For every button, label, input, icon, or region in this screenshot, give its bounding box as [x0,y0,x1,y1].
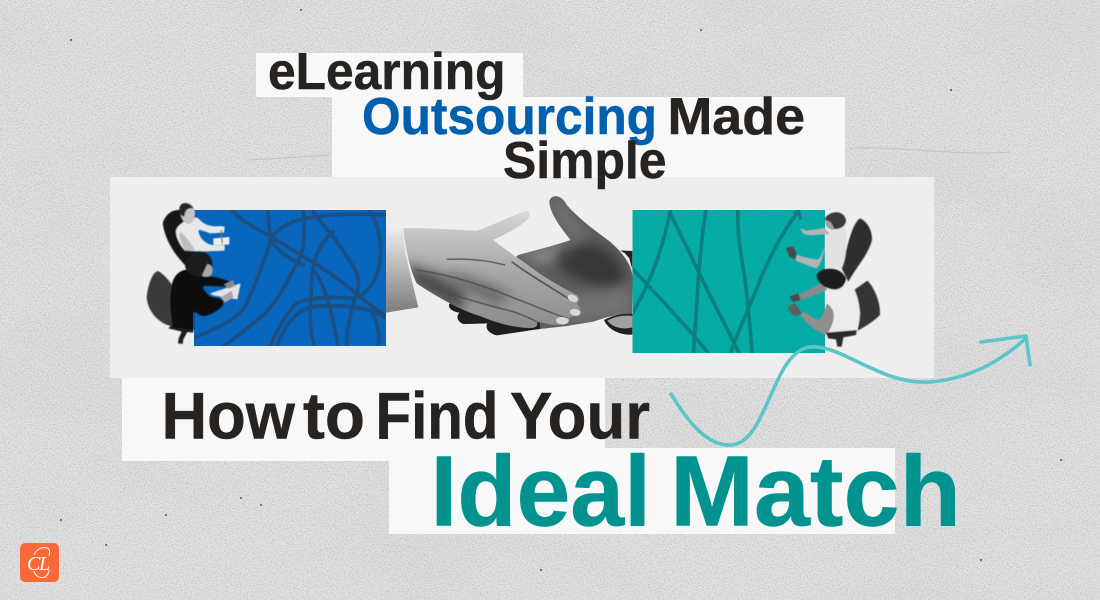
lower man hands [789,293,801,302]
wrist shadow [403,263,467,313]
thumb tone [550,200,586,244]
fingernails [518,209,581,325]
lower chair [854,281,880,331]
lower man hair [817,269,846,290]
teal square with scribble lines [632,210,825,355]
upper man phone hand [786,247,797,259]
upper chair [842,218,872,282]
lower woman hands [224,280,235,289]
lower man arm shading [801,303,834,335]
white strip behind How to Find Your [122,378,605,461]
lit upper palm [518,240,580,263]
blue square with scribble lines [193,210,387,347]
left hand, light [400,208,587,332]
lower palm tone [567,287,632,325]
headline: Ideal Match: Ideal [430,436,651,548]
logo: CL badge: L [38,553,50,575]
white strip behind eLearning [256,53,523,97]
headline: Ideal Match [430,436,961,548]
lower chair base [826,330,857,347]
headline: How to Find Your: Your [510,378,650,452]
left shirt cuff [386,226,418,313]
white strip behind Ideal Match [389,448,895,534]
chair base [168,325,193,344]
headline: How to Find Your: Find [376,378,498,452]
back of hand shadow [440,273,513,305]
headline: How to Find Your: to [303,378,365,452]
dark palm shadow [557,243,625,288]
lower man shirt [825,283,860,333]
upper man head [825,212,846,229]
clipboard [210,283,241,299]
logo: CL badge: C [27,553,41,575]
central light grey panel [110,177,934,378]
upper man arms [796,228,830,268]
handshake [386,190,633,338]
dark underside fingers [449,304,540,336]
top woman head [180,203,195,224]
right shirt cuff and suit sleeve [604,250,632,335]
top chair [163,210,195,270]
people on the left: two women at desk [147,203,241,344]
logo: CL badge [20,543,59,582]
title: eLearning: eLearning [268,43,506,101]
people on the right: two men with phones [786,212,880,347]
headline: Ideal Match: Match [670,436,961,548]
title: Simple: Simple [503,132,666,190]
top woman shirt shading [180,232,195,251]
headline: How to Find Your: How [162,378,296,452]
lower woman hair [185,251,212,277]
paper held by top woman [213,237,229,245]
lower woman jacket [170,270,234,330]
title: Made: Made [668,88,805,146]
headline: How to Find Your [162,378,650,452]
title: Outsourcing: Outsourcing [362,88,657,146]
teal curved growth arrow [671,336,1030,445]
bottom chair [147,271,175,327]
right hand, dark [443,190,633,338]
lower man upper arm [797,283,827,301]
top woman shirt and arms [176,218,225,251]
white strip behind Outsourcing Made Simple [332,97,845,177]
upper man shirt [825,228,847,268]
knuckle and tendon shading [417,259,573,322]
